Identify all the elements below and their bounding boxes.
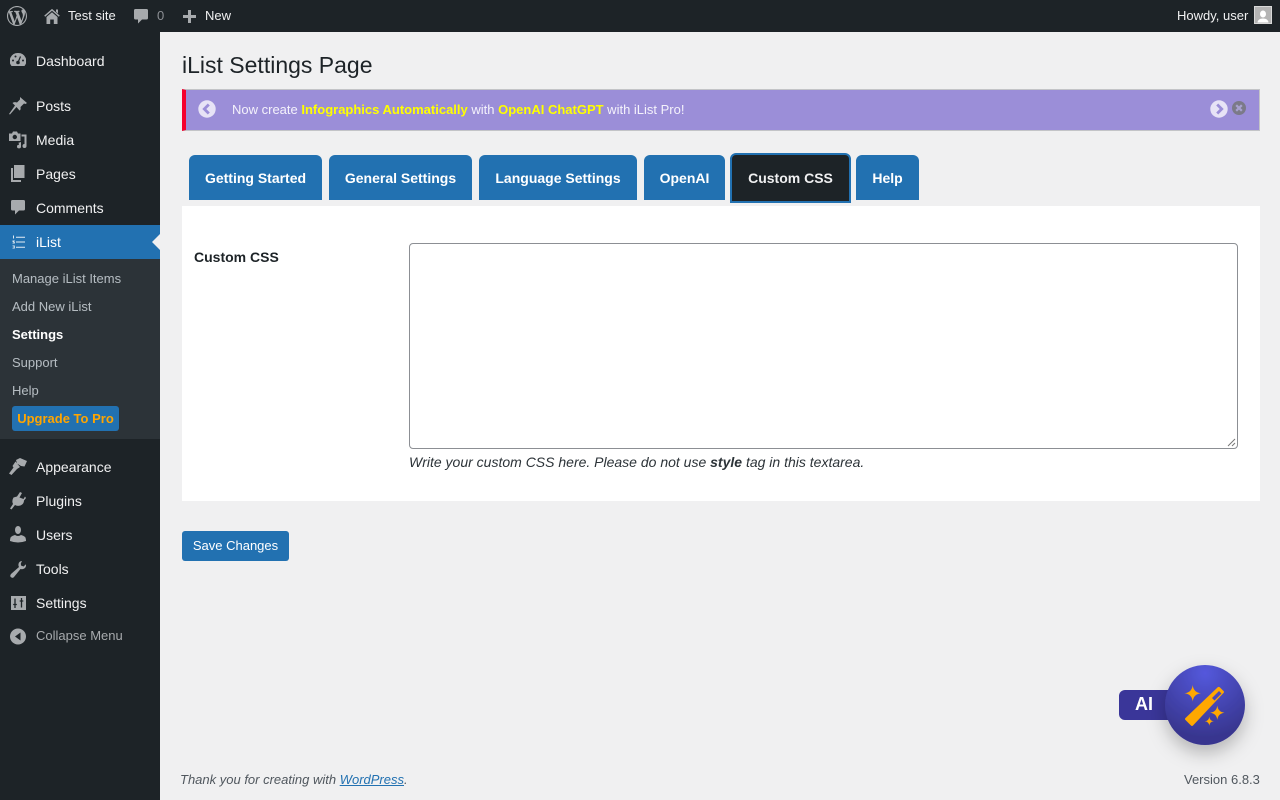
upgrade button: [12, 406, 119, 431]
notice text: Now create Infographics Automatically with OpenAI ChatGPT with iList Pro!: [232, 102, 684, 117]
icon: wordpress logo: [7, 6, 27, 26]
icon: comments: [134, 9, 148, 24]
footer version: Version 6.8.3: [1184, 772, 1260, 787]
circle icon: magic wand: [1156, 664, 1254, 762]
icon: plugins: [10, 492, 26, 510]
submenu panel: [0, 259, 160, 439]
tab: getting started: [189, 155, 322, 200]
AI floating button: [1119, 664, 1254, 762]
page title: iList Settings Page: [182, 52, 373, 78]
settings panel: [182, 206, 1260, 501]
user avatar: [1254, 6, 1272, 24]
tab: getting started: Getting Started: [205, 170, 306, 186]
tab: language settings: [479, 155, 637, 200]
AI label pill: AI: [1135, 694, 1153, 714]
footer thanks: Thank you for creating with WordPress.: [180, 772, 408, 787]
tab: openai: OpenAI: [660, 170, 709, 186]
submenu: manage items: Manage iList Items: [12, 271, 121, 286]
menu: media: Media: [36, 132, 74, 148]
save button: [182, 531, 289, 561]
upgrade button: Upgrade To Pro: [17, 411, 114, 426]
menu: iList label: iList: [36, 234, 61, 250]
icon: pages: [11, 165, 24, 182]
menu: users: Users: [36, 527, 73, 543]
icon: comments: [11, 200, 25, 214]
active arrow: [152, 234, 160, 250]
tab: general settings: General Settings: [345, 170, 456, 186]
icon: users: [10, 526, 26, 542]
icon: media: [9, 132, 26, 148]
submenu: support: Support: [12, 355, 58, 370]
admin top bar: [0, 0, 1280, 32]
comment count: 0: [157, 8, 164, 23]
promo notice banner: [182, 89, 1260, 131]
tab: language settings: Language Settings: [495, 170, 621, 186]
icon: collapse: [10, 628, 26, 644]
resize handle: [1228, 438, 1236, 446]
tab: help: Help: [872, 170, 903, 186]
AI label pill: [1119, 690, 1179, 720]
menu: dashboard: Dashboard: [36, 53, 104, 69]
menu: appearance: Appearance: [36, 459, 112, 475]
help text: Write your custom CSS here. Please do not use style tag in this textarea.: [409, 454, 864, 470]
tab: custom css active: Custom CSS: [748, 170, 833, 186]
icon: plus: [183, 10, 196, 23]
icon: posts pin: [9, 97, 27, 114]
howdy user: Howdy, user: [1177, 8, 1248, 23]
menu: tools: Tools: [36, 561, 69, 577]
menu: collapse: Collapse Menu: [36, 628, 123, 643]
icon: settings sliders: [11, 596, 26, 610]
menu: comments: Comments: [36, 200, 104, 216]
icon: next arrow: [1210, 100, 1228, 118]
icon: home: [44, 9, 60, 24]
tab: custom css active: [730, 153, 851, 203]
submenu: settings: Settings: [12, 327, 63, 342]
tab: general settings: [329, 155, 472, 200]
icon: tools wrench: [10, 561, 26, 578]
save button: Save Changes: [193, 538, 278, 553]
tab: help: [856, 155, 919, 200]
submenu: help: Help: [12, 383, 39, 398]
menu: plugins: Plugins: [36, 493, 82, 509]
site name: Test site: [68, 8, 116, 23]
tab: openai: [644, 155, 725, 200]
admin sidebar: [0, 32, 160, 800]
new link: New: [205, 8, 231, 23]
menu: posts: Posts: [36, 98, 71, 114]
submenu: add new: Add New iList: [12, 299, 91, 314]
icon: dashboard: [10, 53, 26, 66]
icon: numbered list: [12, 236, 25, 248]
icon: dismiss: [1232, 101, 1246, 115]
textarea: [409, 243, 1238, 449]
active menu: iList: [0, 225, 160, 259]
tab navigation: [189, 153, 919, 203]
menu: settings: Settings: [36, 595, 87, 611]
icon: appearance brush: [9, 458, 27, 475]
menu: pages: Pages: [36, 166, 76, 182]
icon: previous arrow: [198, 100, 216, 118]
field label: Custom CSS: [194, 249, 279, 265]
